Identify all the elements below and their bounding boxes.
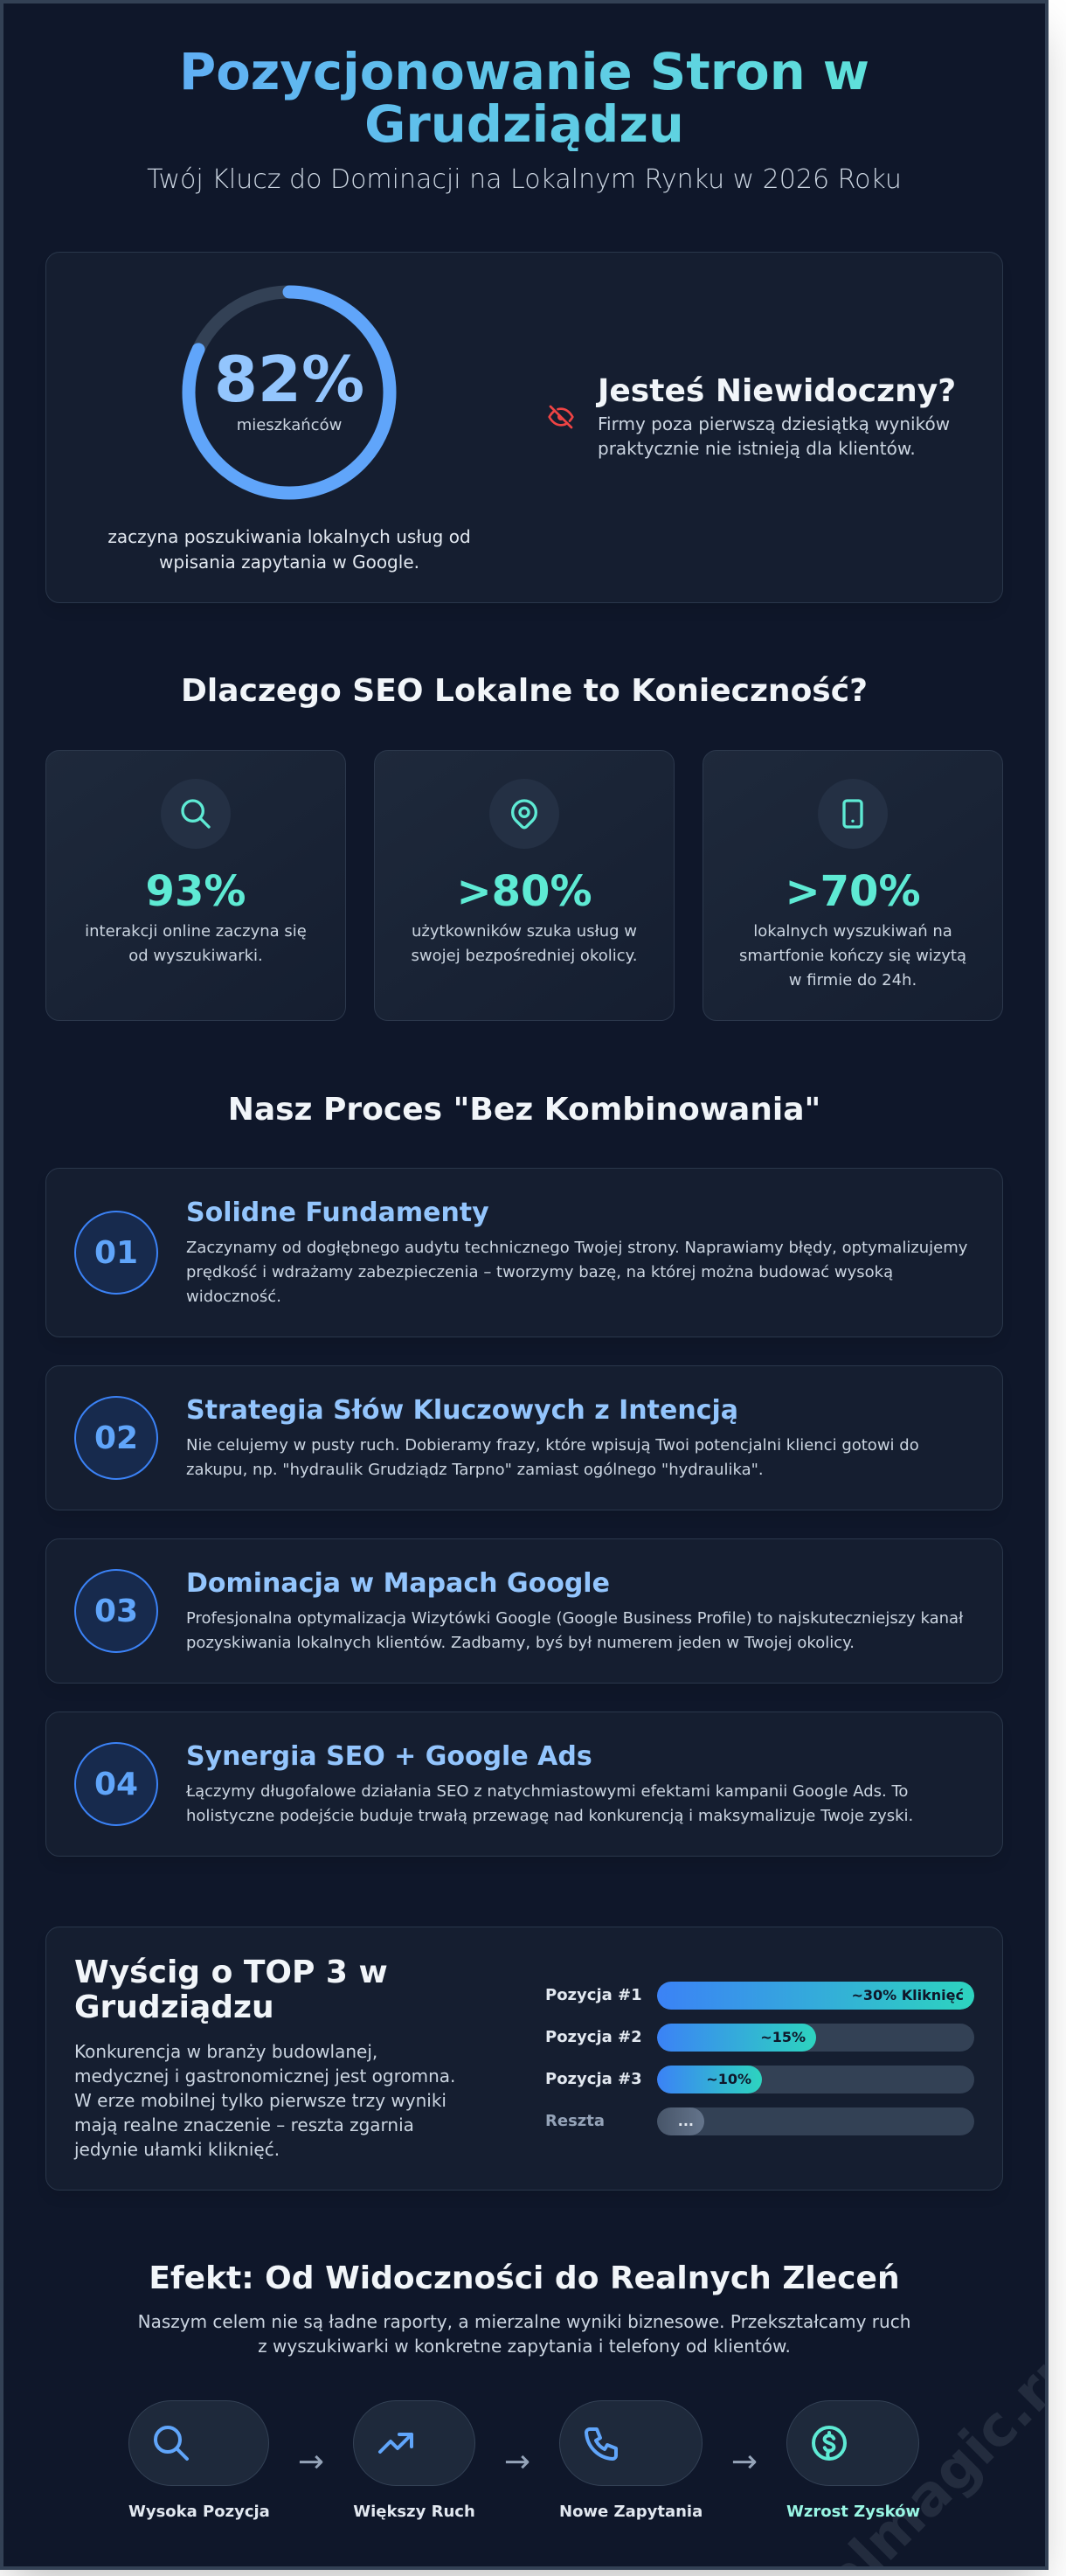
heading: process: Nasz Proces "Bez Kombinowania": [228, 1092, 820, 1128]
race text: jedynie ułamki kliknięć.: [74, 2139, 280, 2160]
heading: why local SEO: Dlaczego SEO Lokalne to Konieczność?: [181, 673, 868, 709]
stat text: swojej bezpośredniej okolicy.: [412, 947, 637, 965]
stat value: >80%: [456, 867, 592, 916]
flow label: Nowe Zapytania: [559, 2503, 703, 2521]
ring caption: wpisania zapytania w Google.: [159, 552, 419, 573]
race heading: Wyścig o TOP 3 w: [74, 1955, 388, 1990]
title: Grudziądzu: [364, 95, 684, 154]
icon: smartphone: [818, 779, 888, 849]
arrow: →: [504, 2444, 530, 2480]
flow label: Wzrost Zysków: [786, 2503, 920, 2521]
step 3 title: Dominacja w Mapach Google: [186, 1568, 610, 1599]
text: effect: Naszym celem nie są ładne raporty, a mierzalne wyniki biznesowe. Przekształcamy ruch: [138, 2311, 910, 2332]
step 2 text: [186, 1436, 919, 1479]
bar rest: ...: [678, 2113, 694, 2129]
stat text: lokalnych wyszukiwań na: [753, 922, 952, 941]
stat text: [739, 922, 966, 989]
step 1 text: Zaczynamy od dogłębnego audytu technicznego Twojej strony. Naprawiamy błędy, optymalizujemy: [186, 1239, 967, 1257]
panel: step 3: [45, 1538, 1003, 1684]
step 3 badge: 03: [94, 1594, 138, 1629]
step 3 text: pozyskiwania lokalnych klientów. Zadbamy, byś był numerem jeden w Twojej okolicy.: [186, 1634, 855, 1652]
heading: invisible: Jesteś Niewidoczny?: [598, 373, 956, 409]
text: invisible: Firmy poza pierwszą dziesiątką wyników: [598, 413, 950, 434]
panel: step 2: [45, 1365, 1003, 1510]
ring caption: zaczyna poszukiwania lokalnych usług od: [107, 526, 471, 547]
bar position 3: [657, 2066, 974, 2093]
bar rest: [657, 2107, 974, 2135]
bar position 3: ~10%: [706, 2071, 751, 2087]
label position 2: Pozycja #2: [545, 2028, 642, 2046]
step 4 text: [185, 1782, 913, 1825]
flow label: Wysoka Pozycja: [128, 2503, 270, 2521]
bar position 1: [657, 1982, 974, 2010]
heading: effect: Efekt: Od Widoczności do Realnych Zleceń: [149, 2260, 900, 2296]
step 1 text: [186, 1239, 967, 1306]
step 4 badge: [74, 1742, 158, 1826]
flow step: new inquiries: [559, 2400, 703, 2486]
bar position 1: ~30% Kliknięć: [851, 1987, 964, 2003]
step 3 badge: [74, 1569, 158, 1653]
step 4 text: holistyczne podejście buduje trwałą przewagę nad konkurencją i maksymalizuje Twoje zyski.: [186, 1807, 913, 1825]
panel: stat 80%: [374, 750, 675, 1021]
flow label: Większy Ruch: [353, 2503, 475, 2521]
flow step: more traffic: [353, 2400, 475, 2486]
step 3 text: Profesjonalna optymalizacja Wizytówki Google (Google Business Profile) to najskuteczniejszy kanał: [186, 1609, 963, 1628]
label position 1: Pozycja #1: [545, 1986, 642, 2004]
bar chart: clicks by position: [545, 1982, 974, 2135]
stat value: >70%: [785, 867, 921, 916]
panel: step 4: [45, 1712, 1003, 1857]
step 4 badge: 04: [94, 1767, 138, 1802]
panel: stat 70%: [703, 750, 1003, 1021]
step 1 badge: [74, 1211, 158, 1295]
chart: 82% ring: [182, 285, 397, 500]
stat text: użytkowników szuka usług w: [412, 922, 637, 941]
step 4 text: Łączymy długofalowe działania SEO z natychmiastowymi efektami kampanii Google Ads. To: [186, 1782, 908, 1801]
ring caption: [107, 526, 471, 573]
arrow: →: [731, 2444, 758, 2480]
step 1 text: widoczność.: [186, 1288, 281, 1306]
panel: top 3 race: [45, 1927, 1003, 2191]
icon: eye off: [548, 406, 574, 428]
step 2 badge: 02: [94, 1420, 138, 1456]
panel: step 1: [45, 1168, 1003, 1337]
text: invisible: [598, 413, 950, 459]
stat value: 93%: [146, 867, 246, 916]
text: effect: [138, 2311, 910, 2357]
step 2 text: Nie celujemy w pusty ruch. Dobieramy frazy, które wpisują Twoi potencjalni klienci gotowi do: [186, 1436, 919, 1455]
stat text: w firmie do 24h.: [789, 971, 917, 989]
flow step: profit growth: [786, 2400, 919, 2486]
step 1 text: prędkość i wdrażamy zabezpieczenia – tworzymy bazę, na której można budować wysoką: [186, 1263, 893, 1281]
step 1 badge: 01: [94, 1235, 138, 1271]
stat text: od wyszukiwarki.: [128, 947, 263, 965]
step 2 title: Strategia Słów Kluczowych z Intencją: [186, 1395, 738, 1426]
step 4 title: Synergia SEO + Google Ads: [186, 1741, 592, 1772]
step 3 text: [186, 1609, 963, 1652]
bar position 2: [657, 2024, 974, 2052]
text: effect: z wyszukiwarki w konkretne zapytania i telefony od klientów.: [258, 2336, 791, 2357]
icon: search: [161, 779, 231, 849]
race heading: Grudziądzu: [74, 1989, 274, 2025]
title: [45, 46, 1003, 151]
step 1 title: Solidne Fundamenty: [186, 1198, 489, 1228]
icon: map pin: [489, 779, 559, 849]
label rest: Reszta: [545, 2112, 605, 2130]
stat text: [412, 922, 637, 965]
race text: mają realne znaczenie – reszta zgarnia: [74, 2114, 414, 2135]
race text: Konkurencja w branży budowlanej,: [74, 2041, 377, 2062]
title: Pozycjonowanie Stron w: [179, 43, 869, 101]
subtitle: Twój Klucz do Dominacji na Lokalnym Rynku w 2026 Roku: [147, 164, 902, 195]
race heading: [74, 1955, 388, 2025]
ring label: mieszkańców: [237, 416, 342, 434]
stat text: [85, 922, 307, 965]
label position 3: Pozycja #3: [545, 2070, 642, 2088]
stat text: interakcji online zaczyna się: [85, 922, 307, 941]
arrow: →: [298, 2444, 324, 2480]
stat text: smartfonie kończy się wizytą: [739, 947, 966, 965]
bar position 2: ~15%: [760, 2029, 806, 2045]
step 2 badge: [74, 1396, 158, 1480]
panel: 82% invisibility: [45, 252, 1003, 603]
race text: medycznej i gastronomicznej jest ogromna.: [74, 2066, 455, 2086]
ring value: 82%: [214, 343, 364, 416]
text: invisible: praktycznie nie istnieją dla klientów.: [598, 438, 916, 459]
panel: stat 93%: [45, 750, 346, 1021]
race text: [73, 2041, 455, 2160]
step 2 text: zakupu, np. "hydraulik Grudziądz Tarpno" zamiast ogólnego "hydraulika".: [186, 1461, 764, 1479]
race text: W erze mobilnej tylko pierwsze trzy wyniki: [74, 2090, 446, 2111]
flow step: high position: [128, 2400, 269, 2486]
